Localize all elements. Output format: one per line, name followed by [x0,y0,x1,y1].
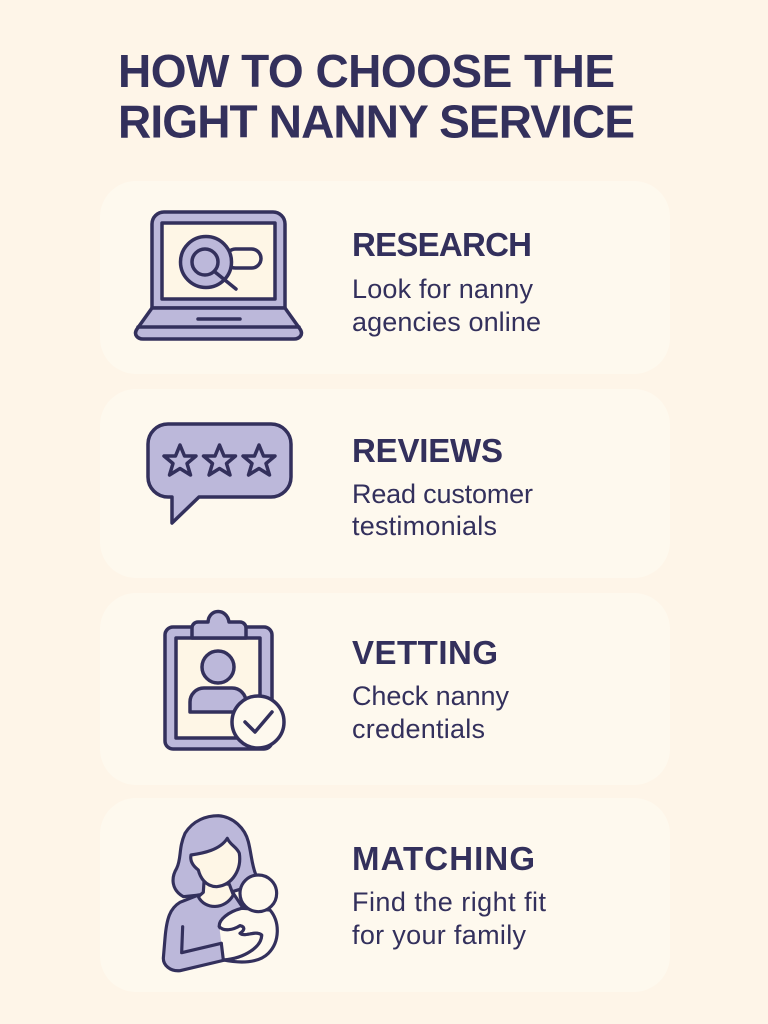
heading: research: RESEARCH [352,226,532,263]
text: reviews description: Read customer [352,479,533,509]
text: matching description: Find the right fit [352,887,546,917]
text: research description [352,274,541,337]
title: HOW TO CHOOSE THE [118,45,615,97]
text: matching description: for your family [352,920,526,950]
heading: matching: MATCHING [352,840,535,877]
text: research description: Look for nanny [352,274,534,304]
text: vetting description: Check nanny [352,681,510,711]
icon: clipboard with profile and check [165,612,284,749]
panel: research [100,181,670,374]
panel: matching [100,798,670,992]
text: vetting description: credentials [352,714,485,744]
text: reviews description [352,479,533,541]
title: RIGHT NANNY SERVICE [118,96,635,148]
panel: reviews [100,389,670,578]
heading: vetting: VETTING [352,634,498,671]
icon: mother holding baby [163,816,277,971]
title [118,45,635,148]
icon: speech bubble with stars [148,424,291,523]
text: matching description [352,887,546,950]
text: research description: agencies online [352,307,541,337]
text: reviews description: testimonials [352,511,497,541]
text: vetting description [352,681,510,744]
panel: vetting [100,593,670,785]
icon: laptop with magnifier [136,212,301,339]
heading: reviews: REVIEWS [352,432,503,469]
